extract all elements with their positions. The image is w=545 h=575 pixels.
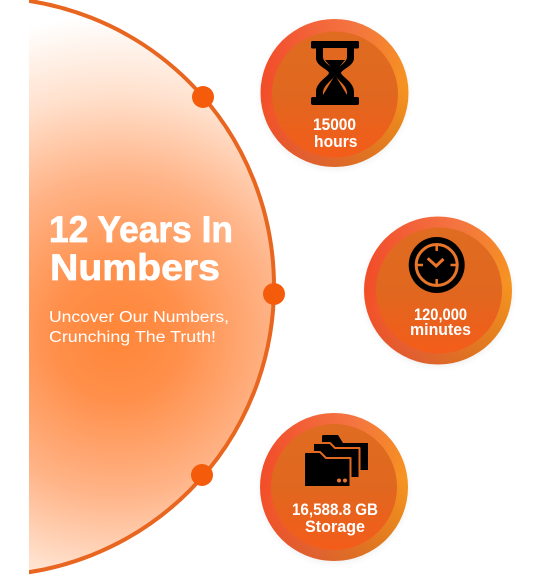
title: Numbers [50,247,220,288]
label: hours [313,115,358,151]
label: hours: hours [314,132,358,151]
stat circle: minutes [364,216,512,366]
label: minutes [410,305,471,339]
label: minutes: 120,000 [414,305,467,324]
title: 12 Years In [49,209,233,250]
stat circle: hours [260,19,408,168]
icon: clock [409,237,465,293]
marker dot middle [263,283,285,305]
label: hours: 15000 [313,115,356,134]
stat circle: storage [260,413,408,562]
marker dot bottom [191,464,213,486]
icon: folders [304,435,368,487]
panel: half circle [0,0,274,575]
title [49,209,233,288]
subtitle: Uncover Our Numbers, [49,309,229,326]
label: storage: 16,588.8 GB [292,500,378,519]
marker dot top [192,86,214,108]
label: storage [292,500,378,536]
label: minutes: minutes [410,320,471,339]
subtitle [49,309,229,346]
icon: hourglass [311,41,359,105]
subtitle: Crunching The Truth! [49,329,216,346]
label: storage: Storage [305,517,365,536]
